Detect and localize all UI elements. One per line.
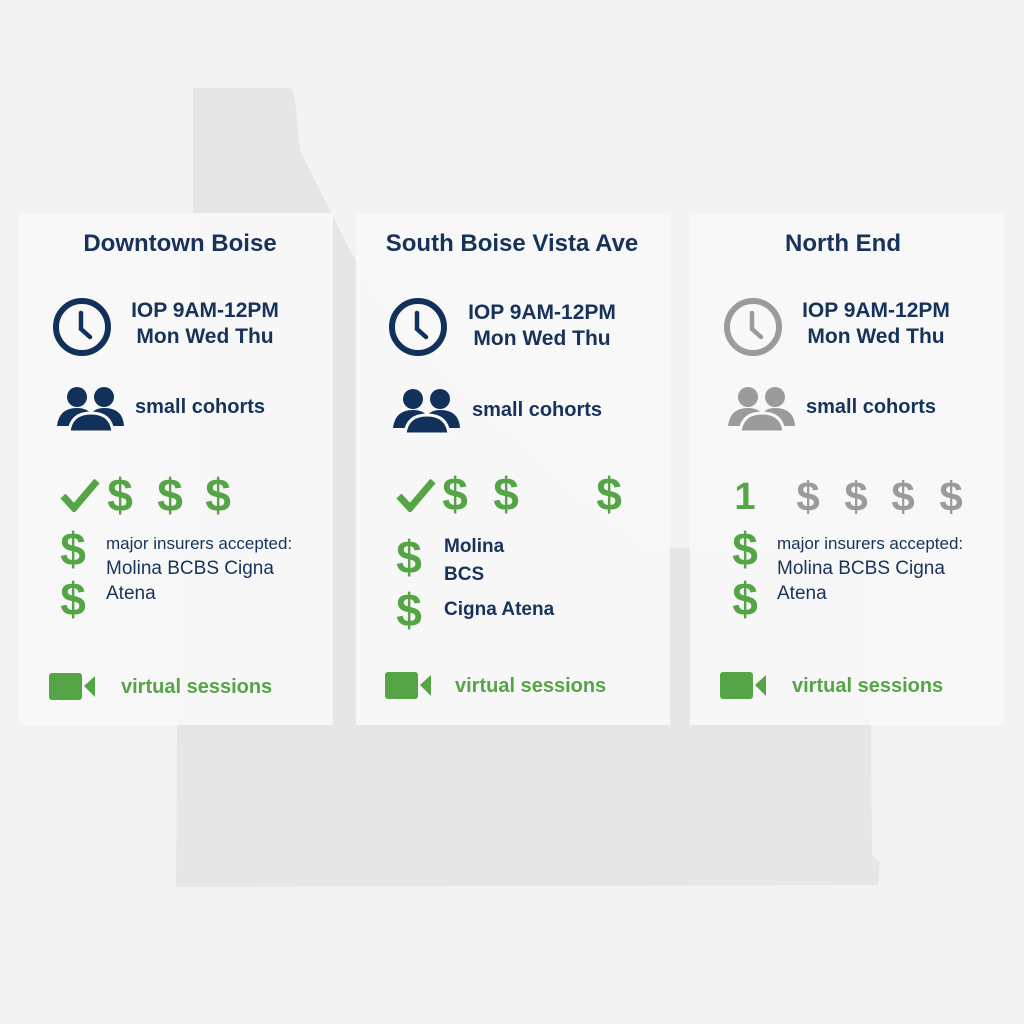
- text: $: [596, 468, 622, 520]
- text: $: [732, 523, 758, 575]
- text: virtual sessions: [792, 675, 943, 697]
- text: $: [493, 468, 519, 520]
- schedule text 2: Mon Wed Thu: [473, 327, 611, 350]
- text: major insurers accepted:: [777, 534, 963, 553]
- text: major insurers accepted:: [106, 534, 292, 553]
- title: South Boise Vista Ave: South Boise Vista Ave: [386, 230, 638, 257]
- icon: people 1: [57, 387, 124, 430]
- text: BCS: [444, 564, 484, 585]
- text: $: [732, 573, 758, 625]
- virtual sessions 3: [720, 672, 943, 699]
- insurers 1: [60, 523, 292, 625]
- schedule text 1: [131, 299, 279, 348]
- schedule text 1: Mon Wed Thu: [136, 325, 274, 348]
- title: North End: North End: [785, 230, 901, 257]
- text: Atena: [106, 583, 156, 604]
- insurers 2: [396, 531, 554, 636]
- text: virtual sessions: [455, 675, 606, 697]
- text: $: [205, 469, 231, 521]
- text: $: [844, 473, 868, 520]
- text: $: [60, 523, 86, 575]
- icon: clock 3: [724, 298, 782, 356]
- icon: clock 2: [389, 298, 447, 356]
- text: $: [107, 469, 133, 521]
- text: $: [442, 468, 468, 520]
- insurers 3: [732, 523, 963, 625]
- virtual sessions 2: [385, 672, 606, 699]
- text: small cohorts 1: small cohorts: [135, 396, 265, 418]
- icon: people 2: [393, 389, 460, 432]
- schedule text 3: [802, 299, 950, 348]
- text: $: [891, 473, 915, 520]
- text: $: [939, 473, 963, 520]
- text: Molina BCBS Cigna: [106, 558, 274, 579]
- pricing row 1: [60, 469, 231, 521]
- text: $: [157, 469, 183, 521]
- text: Molina: [444, 536, 504, 557]
- text: virtual sessions: [121, 676, 272, 698]
- panel: Downtown Boise: [19, 213, 333, 725]
- schedule text 3: IOP 9AM-12PM: [802, 299, 950, 322]
- text: $: [396, 531, 422, 583]
- text: $: [396, 584, 422, 636]
- text: $: [60, 573, 86, 625]
- text: $: [796, 473, 820, 520]
- text: 1: [734, 476, 756, 518]
- pricing row 2: [396, 468, 622, 520]
- schedule text 1: IOP 9AM-12PM: [131, 299, 279, 322]
- title: Downtown Boise: Downtown Boise: [83, 230, 277, 257]
- text: small cohorts 3: small cohorts: [806, 396, 936, 418]
- schedule text 2: [468, 301, 616, 350]
- icon: clock 1: [53, 298, 111, 356]
- text: Atena: [777, 583, 827, 604]
- virtual sessions 1: [49, 673, 272, 700]
- text: Molina BCBS Cigna: [777, 558, 945, 579]
- panel: North End: [690, 213, 1004, 725]
- icon: people 3: [728, 387, 795, 430]
- schedule text 3: Mon Wed Thu: [807, 325, 945, 348]
- pricing row 3: [734, 473, 963, 520]
- text: small cohorts 2: small cohorts: [472, 399, 602, 421]
- text: Cigna Atena: [444, 599, 554, 620]
- panel: South Boise Vista Ave: [356, 213, 670, 725]
- schedule text 2: IOP 9AM-12PM: [468, 301, 616, 324]
